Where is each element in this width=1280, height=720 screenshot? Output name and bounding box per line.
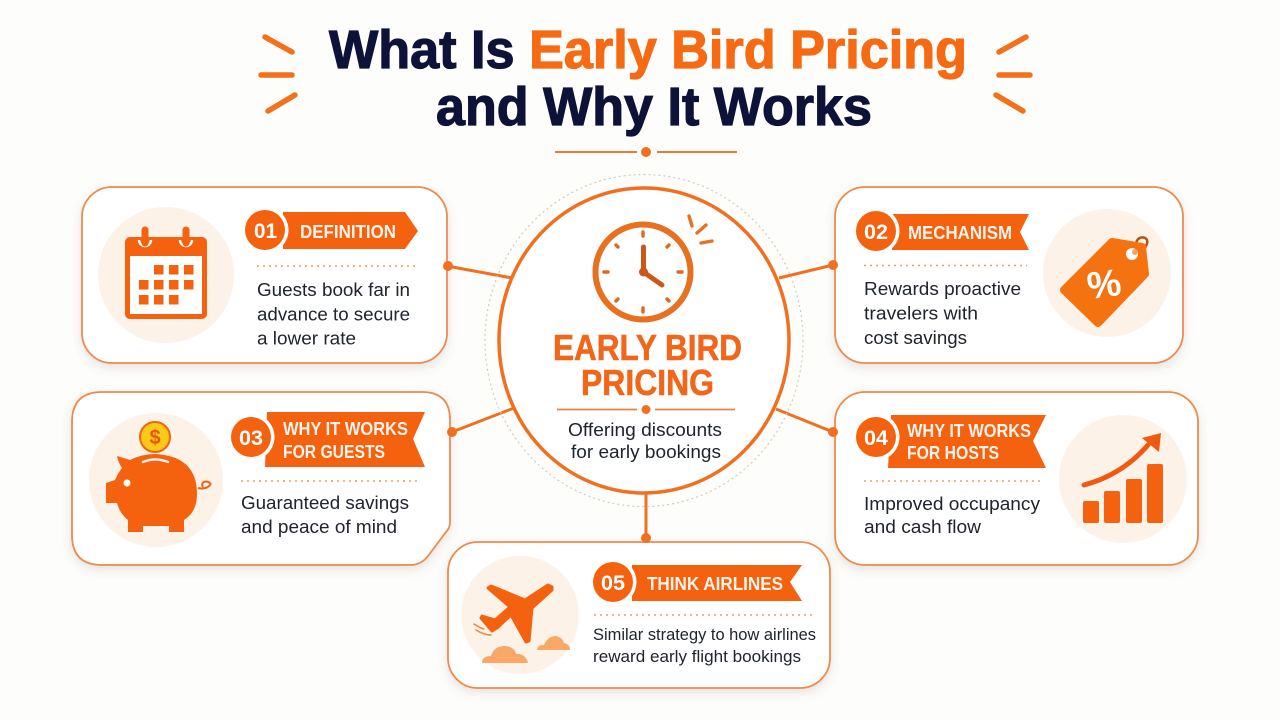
text: guests: Guaranteed savings [241, 493, 409, 513]
text: mechanism: travelers with [864, 304, 978, 324]
badge: 03 why it works for guests: 03 [239, 427, 263, 450]
title divider [555, 147, 737, 157]
hub heading: EARLY BIRD [553, 327, 742, 368]
badge: 05 think airlines: THINK AIRLINES [647, 574, 783, 594]
badge: 05 think airlines [590, 558, 802, 606]
text: definition: a lower rate [257, 328, 356, 348]
hub description: Offering discounts [568, 420, 722, 440]
icon: piggy bank [106, 422, 210, 532]
panel: 05 think airlines [448, 533, 830, 688]
badge: 04 why it works for hosts [852, 414, 1046, 468]
badge: 03 why it works for guests [228, 412, 425, 467]
hub description: for early bookings [571, 442, 721, 462]
badge: 01 definition [242, 206, 418, 254]
badge: 04 why it works for hosts: WHY IT WORKS [907, 421, 1031, 441]
text: airlines: reward early flight bookings [593, 648, 801, 666]
panel: center hub [485, 174, 803, 506]
text: mechanism: cost savings [864, 328, 967, 348]
hub heading [553, 327, 742, 403]
badge: 03 why it works for guests: FOR GUESTS [283, 442, 385, 462]
text: guests: and peace of mind [241, 517, 397, 537]
text: airlines [593, 626, 816, 666]
icon: discount tag [1064, 237, 1147, 323]
text: mechanism: Rewards proactive [864, 279, 1021, 299]
text: hosts: and cash flow [864, 517, 982, 537]
badge: 05 think airlines: 05 [601, 572, 625, 595]
text: definition: Guests book far in [257, 280, 410, 300]
panel: 03 why it works for guests [72, 392, 457, 565]
badge: 02 mechanism: 02 [864, 221, 888, 244]
badge: 01 definition: 01 [254, 220, 277, 243]
icon: calendar [125, 230, 207, 319]
text: mechanism [864, 279, 1021, 348]
badge: 02 mechanism [852, 208, 1029, 254]
badge: 03 why it works for guests: WHY IT WORKS [283, 419, 408, 439]
icon: clock [596, 216, 712, 320]
badge: 04 why it works for hosts: 04 [864, 427, 888, 450]
icon: left title rays [261, 37, 295, 111]
badge: 02 mechanism: MECHANISM [908, 223, 1012, 243]
panel: 01 definition [82, 187, 453, 363]
connector lines [447, 265, 833, 538]
title: and Why It Works [436, 77, 872, 137]
icon: piggy bank: $ [149, 427, 161, 449]
title [329, 20, 967, 137]
hub heading: PRICING [581, 362, 714, 403]
icon: discount tag: % [1084, 262, 1124, 308]
text: hosts: Improved occupancy [864, 494, 1040, 514]
text: guests [241, 493, 409, 537]
icon: growth chart [1083, 433, 1163, 523]
badge: 01 definition: DEFINITION [300, 222, 396, 242]
panel: 04 why it works for hosts [828, 392, 1198, 565]
text: hosts [864, 494, 1040, 537]
panel: 02 mechanism [828, 187, 1183, 363]
text: definition [257, 280, 410, 348]
title: What Is Early Bird Pricing [329, 20, 967, 80]
hub divider [557, 405, 735, 414]
hub description [568, 420, 722, 462]
badge: 04 why it works for hosts: FOR HOSTS [907, 443, 999, 463]
text: airlines: Similar strategy to how airlines [593, 626, 816, 644]
text: definition: advance to secure [257, 304, 410, 324]
icon: airplane [474, 585, 570, 663]
icon: right title rays [996, 37, 1030, 111]
